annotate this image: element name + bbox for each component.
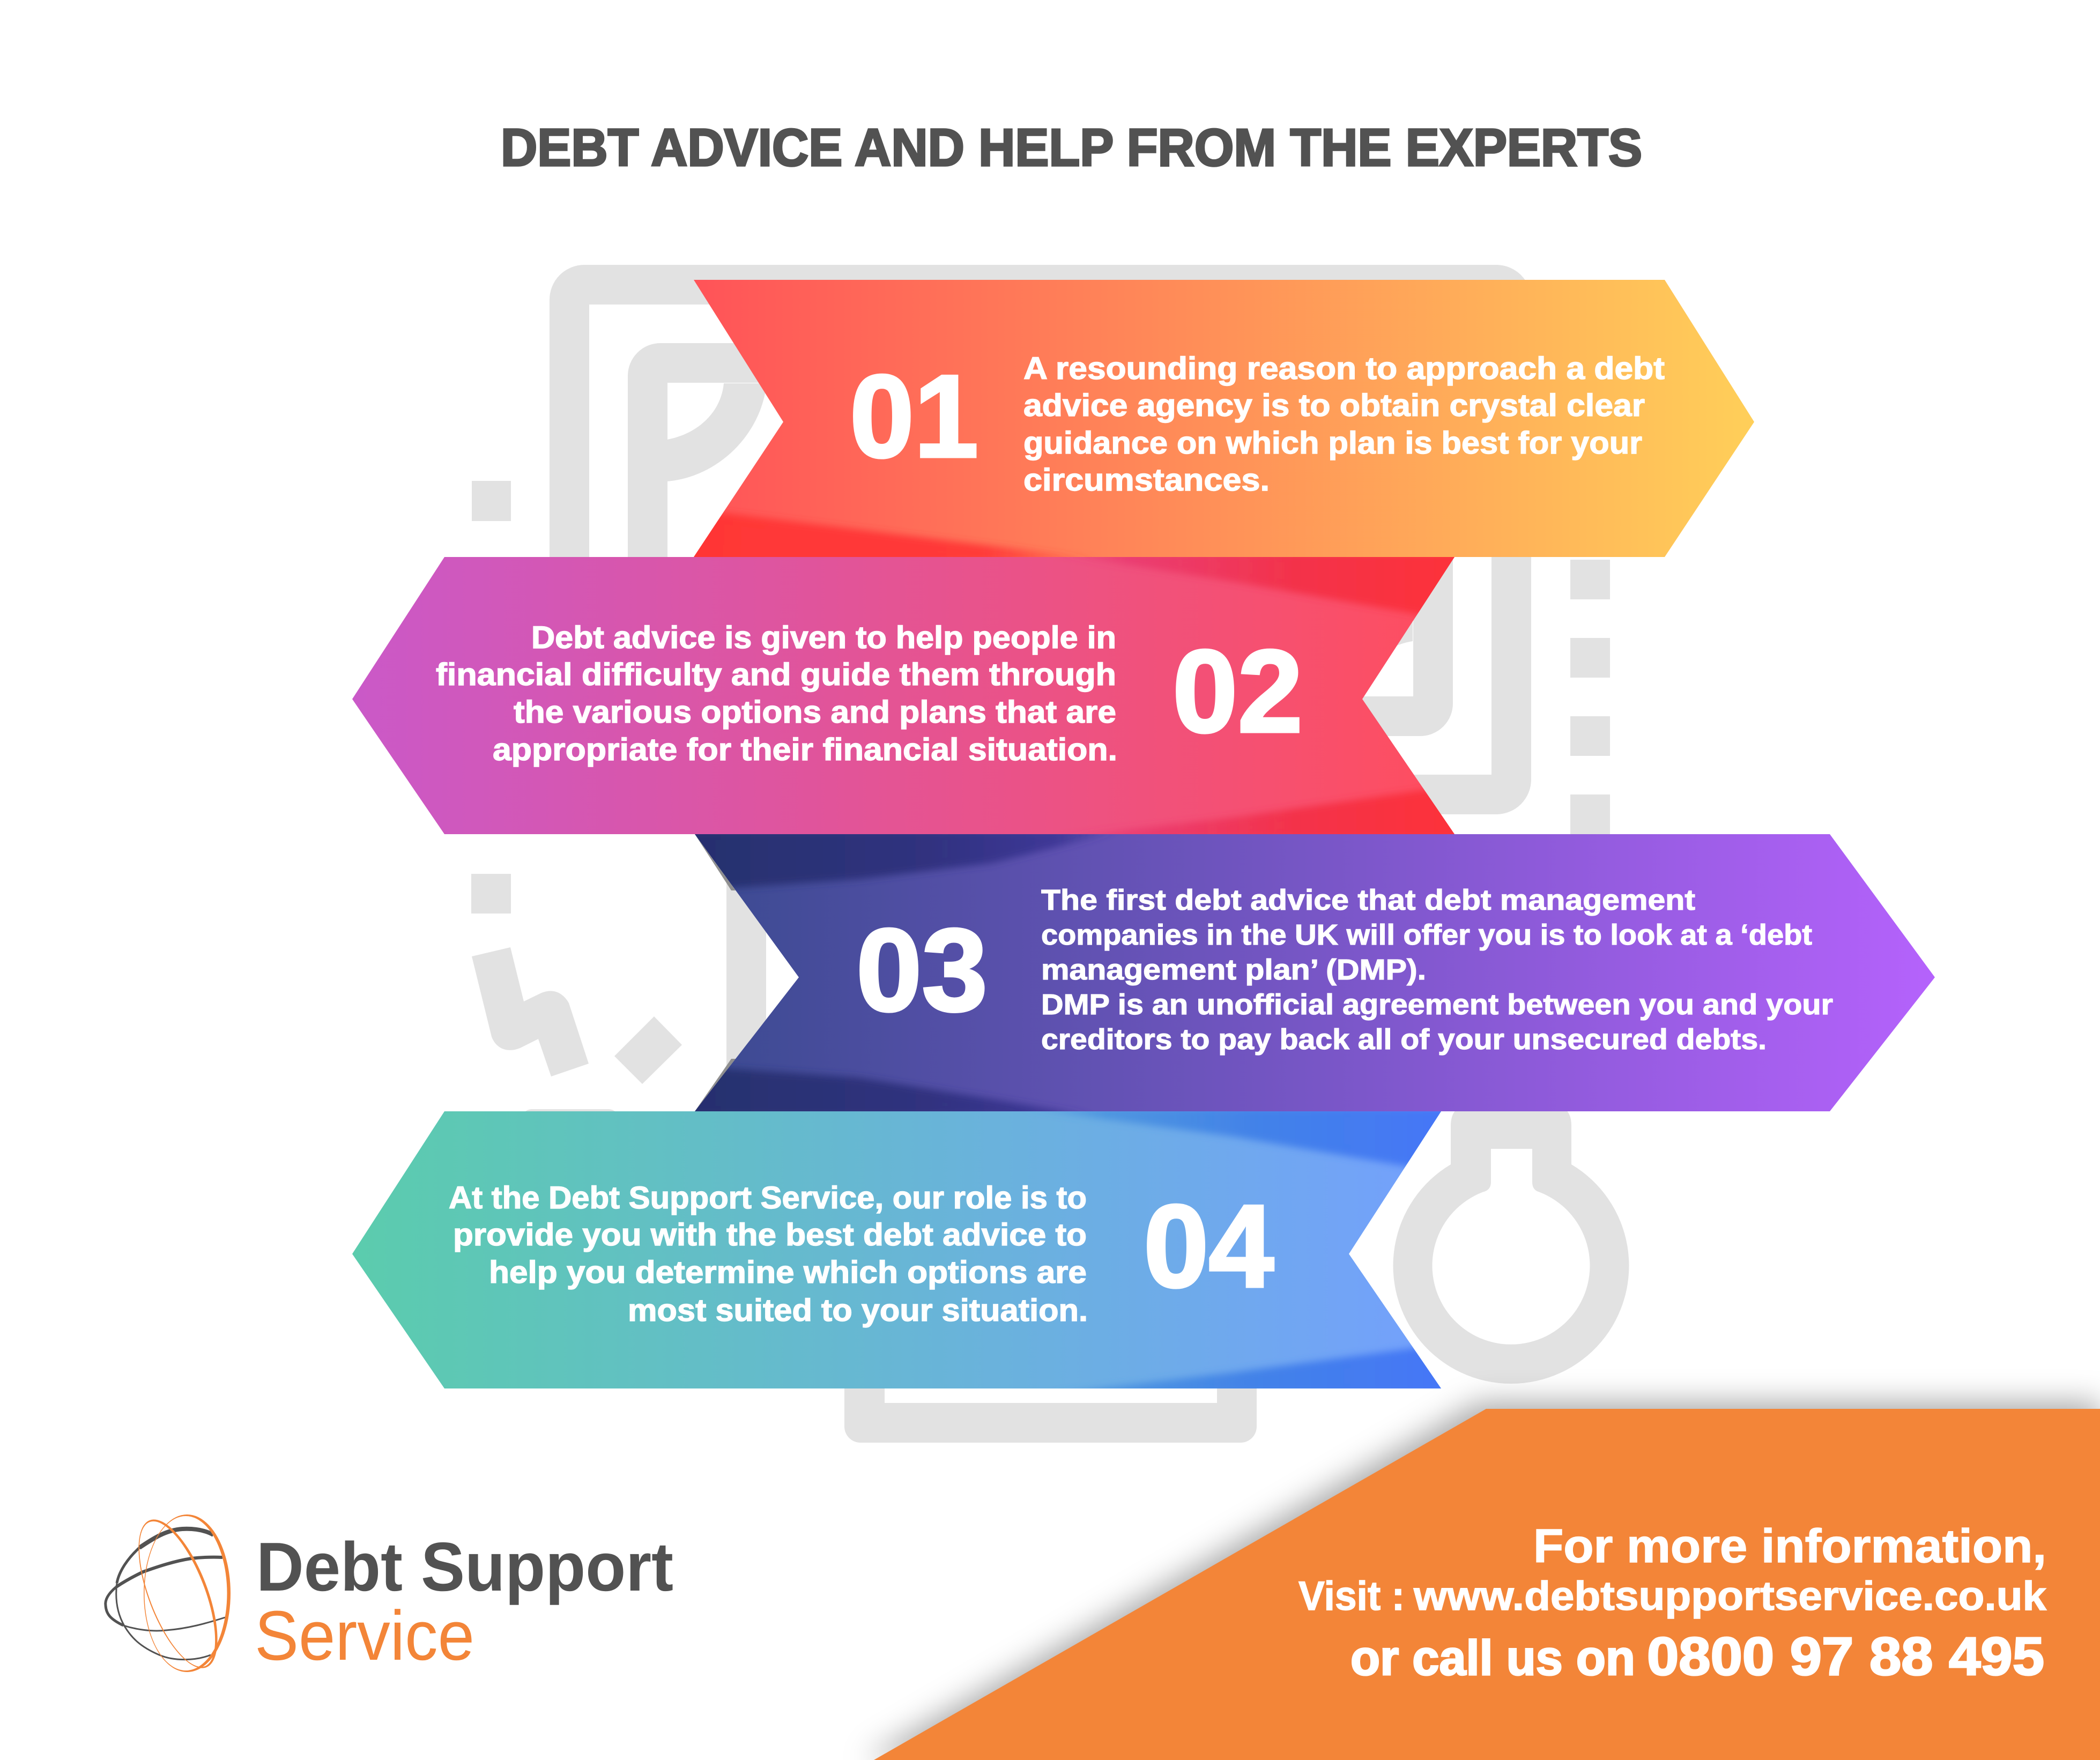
ribbon 02 number: 02 (1173, 626, 1303, 757)
contact line: more information: For more information, (1533, 1519, 2046, 1572)
ribbon 01 number: 01 (850, 351, 978, 482)
ribbon 04 text: provide you with the best debt advice to (453, 1217, 1087, 1252)
logo: Debt Support Service (106, 1510, 673, 1678)
ribbon 02 text: Debt advice is given to help people in (531, 620, 1116, 655)
icon: vertical bar (726, 858, 766, 1126)
icon: bottom frame (844, 1233, 1257, 1443)
ribbon 04 shape (352, 1111, 1441, 1388)
title: DEBT ADVICE AND HELP FROM THE EXPERTS (501, 118, 1642, 177)
ribbon 01 text: advice agency is to obtain crystal clear (1023, 388, 1645, 423)
icon: bottom-right corner arc (1314, 599, 1413, 696)
ribbon 01 text: guidance on which plan is best for your (1023, 426, 1642, 461)
ribbon 02 shape (352, 557, 1455, 834)
panel: ribbon 02 (352, 552, 1469, 839)
panel: ribbon 03 (686, 830, 1935, 1116)
icon: left upper square (472, 481, 511, 521)
ribbon 03 text: DMP is an unofficial agreement between you and your (1041, 989, 1833, 1021)
contact line: phone: or call us on (1350, 1631, 1635, 1685)
ribbon 02 text: the various options and plans that are (514, 695, 1116, 730)
ribbon 03 number: 03 (856, 905, 988, 1036)
ribbon 04 number: 04 (1144, 1181, 1274, 1312)
ribbon 04 text: most suited to your situation. (628, 1293, 1088, 1328)
panel: orange contact corner (874, 1409, 2100, 1760)
panel: ribbon 01 (665, 280, 1754, 568)
icon: zigzag shape (472, 947, 589, 1076)
ribbon 03 fold shading (686, 830, 1126, 1116)
ribbon 03 text: creditors to pay back all of your unsecured debts. (1041, 1023, 1767, 1056)
icon: outer document frame (569, 285, 1511, 794)
icon: left lower square (471, 874, 511, 914)
ribbon 01 fold shading (694, 510, 1073, 557)
ribbon 01 text: circumstances. (1023, 463, 1270, 497)
ribbon 01 text: A resounding reason to approach a debt (1023, 351, 1665, 386)
icon: inner document frame (648, 363, 1433, 716)
contact line: phone (1350, 1627, 2044, 1687)
ribbon 03 shape (695, 834, 1935, 1111)
ribbon 03 text: management plan’ (DMP). (1041, 954, 1426, 986)
ribbon 01 shape (694, 280, 1754, 557)
ribbon 04 text: At the Debt Support Service, our role is to (449, 1180, 1087, 1215)
ribbon 03 text: The first debt advice that debt management (1041, 884, 1695, 916)
ribbon 01 text (1023, 351, 1665, 497)
icon: bulb ring with neck (1393, 1104, 1629, 1384)
icon: top-left corner arc (667, 383, 767, 481)
panel: ribbon 04 (352, 1107, 1458, 1394)
ribbon 03 text (1041, 884, 1833, 1056)
ribbon 04 text (449, 1180, 1088, 1328)
ribbon 03 edge shadows (695, 834, 736, 1111)
icon: diamond (614, 1016, 682, 1084)
ribbon 02 text: financial difficulty and guide them through (436, 657, 1116, 692)
ribbon 04 text: help you determine which options are (489, 1255, 1087, 1290)
contact line: phone: 0800 97 88 495 (1647, 1627, 2044, 1687)
contact line: website: www.debtsupportservice.co.uk (1413, 1573, 2047, 1619)
ribbon 04 fold shading (1013, 1107, 1458, 1394)
ribbon 02 text: appropriate for their financial situation. (493, 732, 1117, 767)
background icon: grey line art behind ribbons (471, 285, 1629, 1443)
contact text (1298, 1519, 2047, 1687)
orange contact panel shadow (864, 1402, 2100, 1760)
ribbon 02 text (436, 620, 1117, 767)
icon: small top tab (521, 1109, 619, 1141)
ribbon 03 text: companies in the UK will offer you is to look at a ‘debt (1041, 919, 1812, 951)
logo globe icon (106, 1510, 234, 1678)
icon: right dashes (1570, 560, 1610, 848)
contact line: website: Visit : (1298, 1573, 1405, 1619)
logo wordmark: Service: Service (255, 1596, 474, 1675)
logo wordmark: Debt Support: Debt Support (256, 1528, 673, 1606)
ribbon 02 fold shading (1045, 552, 1469, 839)
